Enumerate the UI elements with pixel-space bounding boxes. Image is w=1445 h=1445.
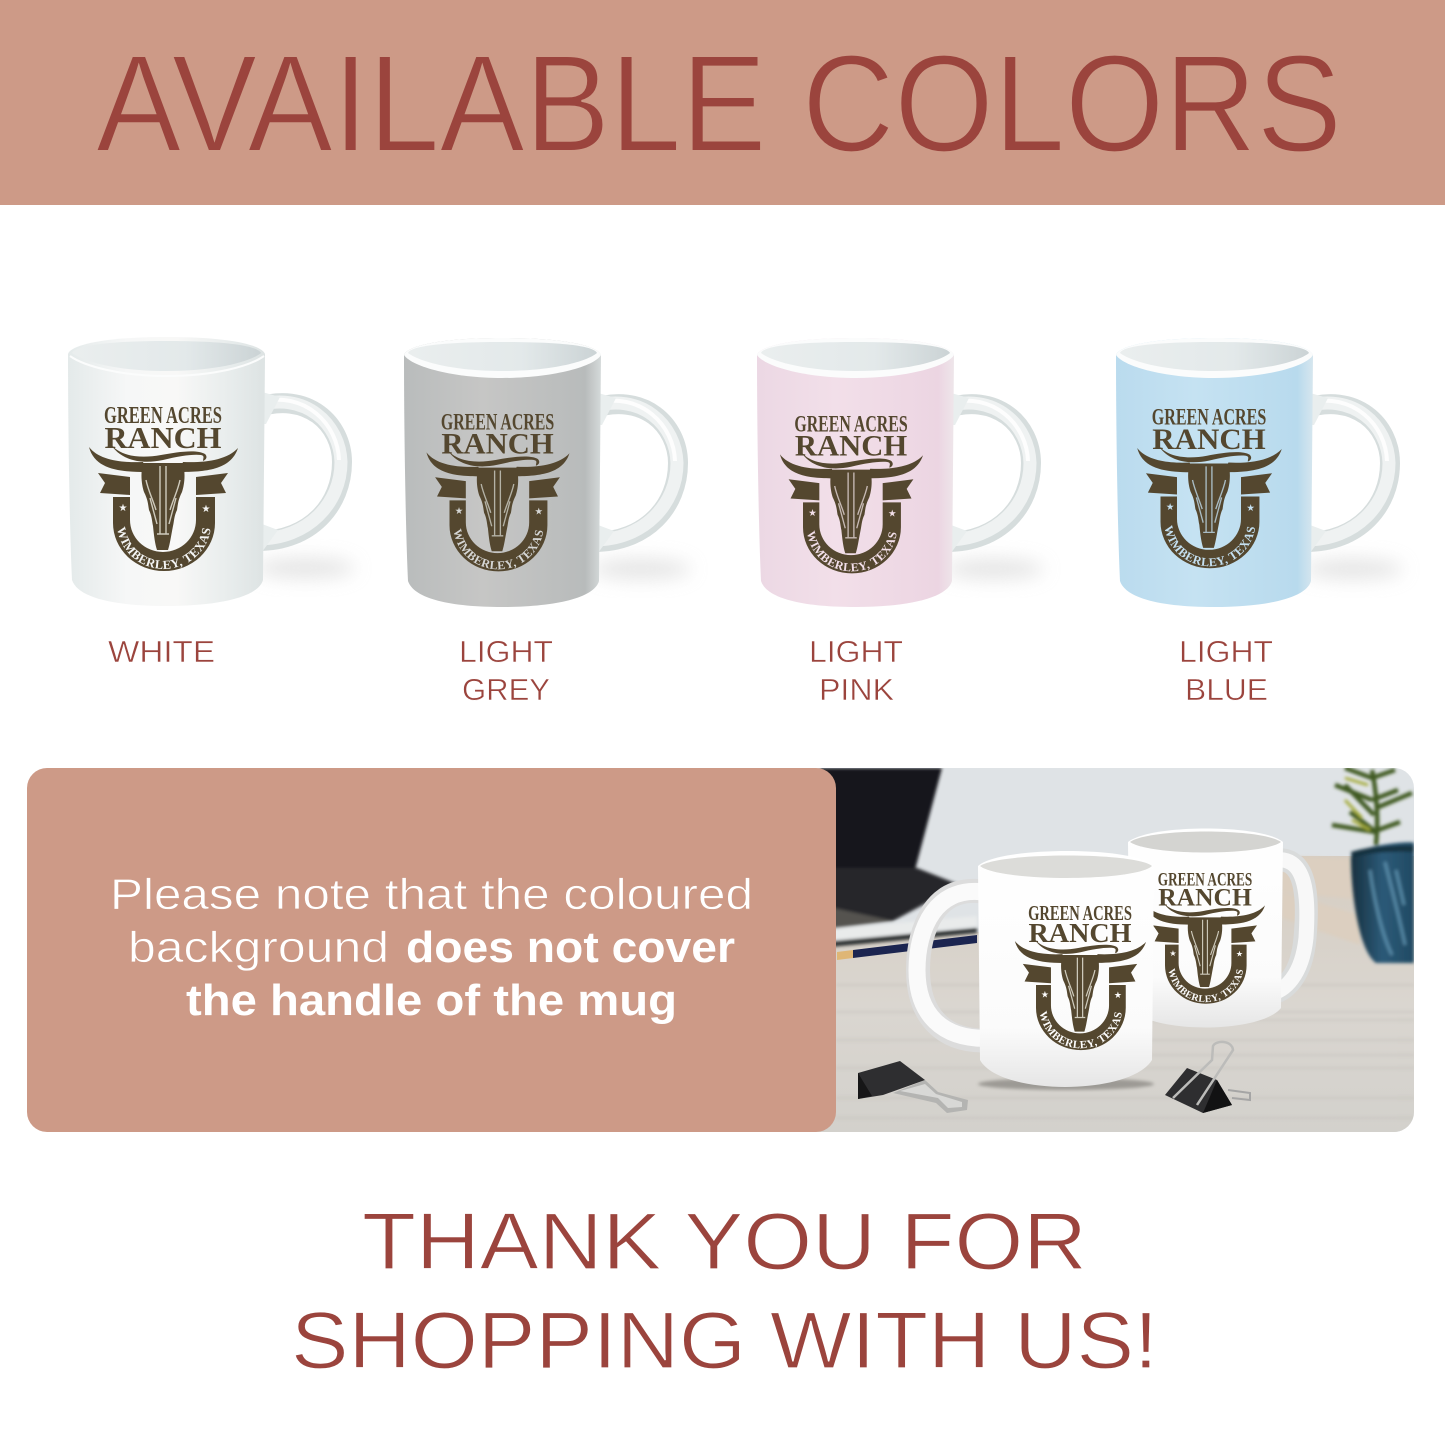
mug: white xyxy=(68,338,352,606)
logo: Green Acres Ranch xyxy=(780,410,923,574)
logo: Green Acres Ranch: WIMBERLEY, TEXAS xyxy=(1168,968,1243,1002)
logo: Green Acres Ranch: ★ xyxy=(888,509,897,520)
logo: Green Acres Ranch: RANCH xyxy=(1152,422,1266,456)
plant and vase xyxy=(1332,768,1414,963)
logo: Green Acres Ranch: ★ xyxy=(455,506,464,517)
front mug xyxy=(906,851,1154,1092)
logo: Green Acres Ranch: WIMBERLEY, TEXAS xyxy=(1165,525,1255,566)
logo: Green Acres Ranch: RANCH xyxy=(1158,884,1252,911)
pencil xyxy=(837,935,977,960)
title: AVAILABLE COLORS xyxy=(96,27,1342,181)
mug: light pink xyxy=(757,338,1041,607)
logo: Green Acres Ranch: GREEN ACRES xyxy=(794,410,908,436)
binder clip: right xyxy=(1165,1042,1250,1113)
closing message: THANK YOU FOR xyxy=(362,1197,1087,1287)
photo: mugs on desk xyxy=(817,768,1414,1132)
logo: Green Acres Ranch: RANCH xyxy=(795,429,907,462)
note text: the handle of the mug xyxy=(186,976,677,1025)
logo: Green Acres Ranch: WIMBERLEY, TEXAS xyxy=(118,526,210,570)
desk xyxy=(780,856,1414,1132)
label: light blue: BLUE xyxy=(1185,672,1268,707)
logo: Green Acres Ranch: RANCH xyxy=(1029,918,1131,948)
label: white: WHITE xyxy=(108,634,215,669)
closing message xyxy=(291,1197,1158,1386)
laptop xyxy=(820,768,977,948)
logo: Green Acres Ranch: ★ xyxy=(119,503,128,514)
logo: Green Acres Ranch: WIMBERLEY, TEXAS xyxy=(808,530,896,572)
note text: does not cover xyxy=(406,923,735,972)
logo: Green Acres Ranch: ★ xyxy=(202,504,211,515)
logo: Green Acres Ranch: RANCH xyxy=(441,427,554,460)
logo: Green Acres Ranch: ★ xyxy=(1166,502,1175,513)
mug: light blue xyxy=(1116,338,1400,607)
logo: Green Acres Ranch: RANCH xyxy=(104,420,222,455)
logo: Green Acres Ranch: ★ xyxy=(808,508,817,519)
logo: Green Acres Ranch: ★ xyxy=(1246,503,1255,514)
logo: Green Acres Ranch: GREEN ACRES xyxy=(104,403,222,429)
logo: Green Acres Ranch: WIMBERLEY, TEXAS xyxy=(454,528,543,570)
logo: Green Acres Ranch: ★ xyxy=(534,507,543,518)
label: light blue xyxy=(1179,634,1273,707)
note text: Please note that the coloured xyxy=(110,870,753,919)
logo: Green Acres Ranch: ★ xyxy=(1236,950,1243,959)
note panel xyxy=(27,768,836,1132)
logo: Green Acres Ranch: GREEN ACRES xyxy=(1028,901,1132,925)
mug: light grey xyxy=(404,338,688,607)
back mug xyxy=(1128,828,1318,1028)
binder clip: left xyxy=(858,1061,968,1113)
logo: Green Acres Ranch xyxy=(1014,906,1146,1050)
logo: Green Acres Ranch: GREEN ACRES xyxy=(1158,869,1252,890)
label: light grey: LIGHT xyxy=(459,634,553,669)
logo: Green Acres Ranch: GREEN ACRES xyxy=(441,408,554,434)
note text xyxy=(110,870,753,1025)
logo: Green Acres Ranch xyxy=(1153,873,1265,1004)
label: light pink: PINK xyxy=(819,672,894,707)
logo: Green Acres Ranch: ★ xyxy=(1169,949,1177,958)
label: light blue: LIGHT xyxy=(1179,634,1273,669)
logo: Green Acres Ranch: WIMBERLEY, TEXAS xyxy=(1040,1010,1122,1048)
closing message: SHOPPING WITH US! xyxy=(291,1296,1158,1386)
logo: Green Acres Ranch xyxy=(1137,405,1282,568)
logo: Green Acres Ranch: ★ xyxy=(1114,990,1122,1000)
logo: Green Acres Ranch: GREEN ACRES xyxy=(1152,405,1266,431)
note text: background xyxy=(128,923,389,972)
logo: Green Acres Ranch xyxy=(89,403,238,571)
header banner xyxy=(0,0,1445,205)
label: light pink: LIGHT xyxy=(809,634,903,669)
logo: Green Acres Ranch xyxy=(426,408,570,572)
logo: Green Acres Ranch: ★ xyxy=(1041,989,1049,999)
label: light grey xyxy=(459,634,553,707)
label: light pink xyxy=(809,634,903,707)
book xyxy=(1286,856,1358,942)
label: light grey: GREY xyxy=(462,672,550,707)
